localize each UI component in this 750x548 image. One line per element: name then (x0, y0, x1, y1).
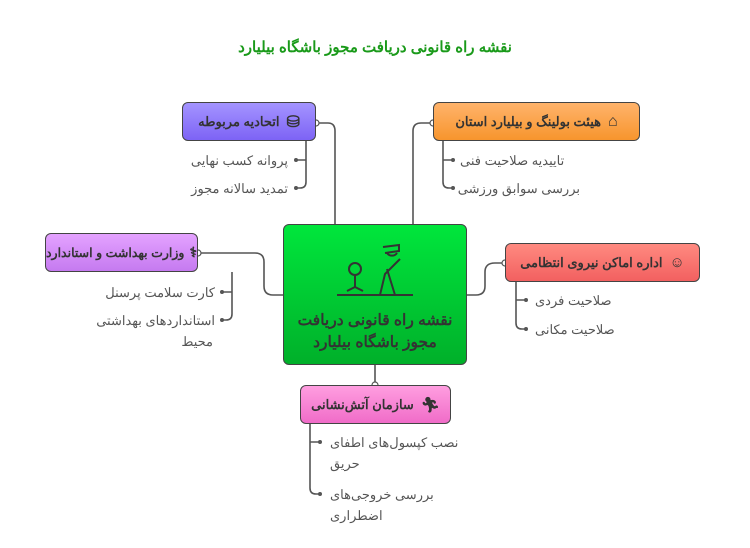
panel: fire department: سازمان آتش‌نشانی (311, 396, 414, 412)
icon: billiard player (337, 244, 413, 296)
panel: fire department (300, 385, 451, 424)
panel: police: اداره اماکن نیروی انتظامی (520, 254, 662, 270)
text: board items (458, 153, 580, 196)
icon: union: ⛁ (286, 114, 300, 130)
text: union items: پروانه کسب نهایی (191, 153, 288, 168)
panel: center: مجوز باشگاه بیلیارد (313, 334, 437, 351)
text: police items (535, 293, 615, 337)
text: health items (96, 285, 215, 349)
panel: unions: اتحادیه مربوطه (198, 114, 279, 128)
panel: police (505, 243, 700, 282)
text: board items: بررسی سوابق ورزشی (458, 181, 580, 196)
text: fire items: نصب کپسول‌های اطفای (330, 435, 458, 450)
panel: unions (182, 102, 316, 141)
icon: location: ⌂ (608, 112, 618, 130)
text: fire items (330, 435, 458, 524)
icon: health: ⚕ (189, 244, 197, 260)
icon: police: ☺ (670, 254, 685, 271)
text: board items: تاییدیه صلاحیت فنی (460, 153, 564, 168)
text: fire items: بررسی خروجی‌های (330, 487, 434, 502)
text: fire items: اضطراری (330, 508, 383, 523)
panel: center: نقشه راه قانونی دریافت (298, 312, 452, 329)
panel: bowling billiard board (433, 102, 640, 141)
text: police items: صلاحیت فردی (535, 293, 611, 308)
panel: health ministry: وزارت بهداشت و استاندارد (46, 246, 184, 260)
text: union items: تمدید سالانه مجوز (191, 181, 288, 196)
title: نقشه راه قانونی دریافت مجوز باشگاه بیلیارد (238, 39, 512, 56)
text: health items: محیط (181, 334, 213, 349)
text: health items: استانداردهای بهداشتی (96, 313, 215, 328)
text: fire items: حریق (330, 456, 360, 471)
icon: fire exit: 🏃︎ (421, 396, 440, 414)
panel: bowling billiard board: هیئت بولینگ و بیلیارد استان (455, 114, 601, 128)
panel: health ministry (45, 233, 198, 272)
text: union items (190, 153, 288, 196)
panel: center (283, 224, 467, 365)
text: police items: صلاحیت مکانی (535, 322, 615, 337)
text: health items: کارت سلامت پرسنل (105, 285, 215, 300)
